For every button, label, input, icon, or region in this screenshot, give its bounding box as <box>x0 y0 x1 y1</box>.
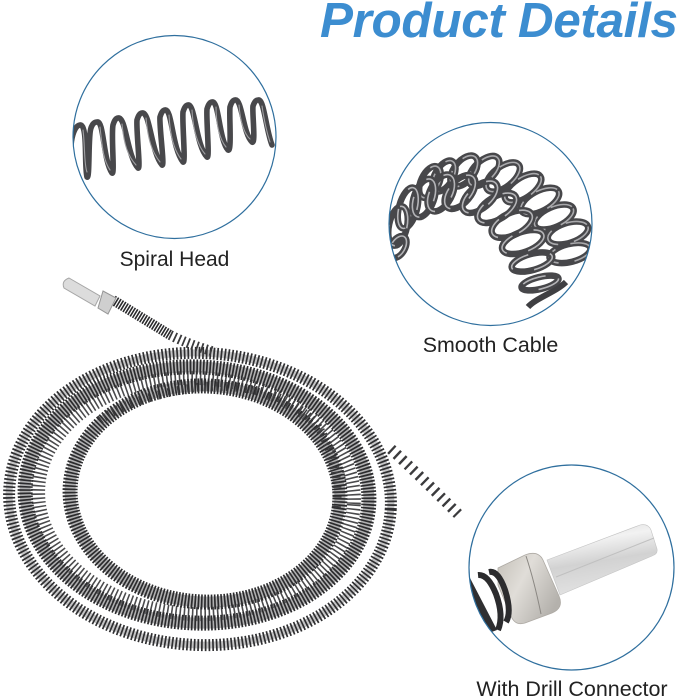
panel: spiral head <box>70 36 276 271</box>
nut <box>498 553 560 624</box>
panel: drill connector <box>469 465 674 698</box>
icon: smooth cable coil <box>385 151 593 307</box>
coil: inner ring <box>100 386 337 510</box>
connector nut <box>98 291 116 314</box>
coil: outer ring <box>2 343 398 655</box>
circle outline: spiral head <box>73 36 276 238</box>
label: spiral head: Spiral Head <box>120 248 229 271</box>
shaft <box>547 525 657 595</box>
main product: coiled cable <box>2 278 458 655</box>
coil: connector spring lead-in <box>170 335 215 352</box>
connector pin <box>63 278 100 306</box>
coil: top connector spring <box>113 300 170 335</box>
coil: second ring <box>19 358 375 632</box>
icon: spiral head coil <box>70 100 272 177</box>
label: smooth cable: Smooth Cable <box>423 333 558 357</box>
circle outline: smooth cable <box>389 122 592 326</box>
coil rings <box>470 572 509 640</box>
circle outline: drill connector <box>469 465 674 670</box>
coil: filler ring <box>32 370 360 622</box>
coil: tail end <box>391 449 458 514</box>
coil: third ring <box>65 379 345 609</box>
panel: smooth cable <box>385 122 593 357</box>
icon: drill connector <box>470 525 657 640</box>
